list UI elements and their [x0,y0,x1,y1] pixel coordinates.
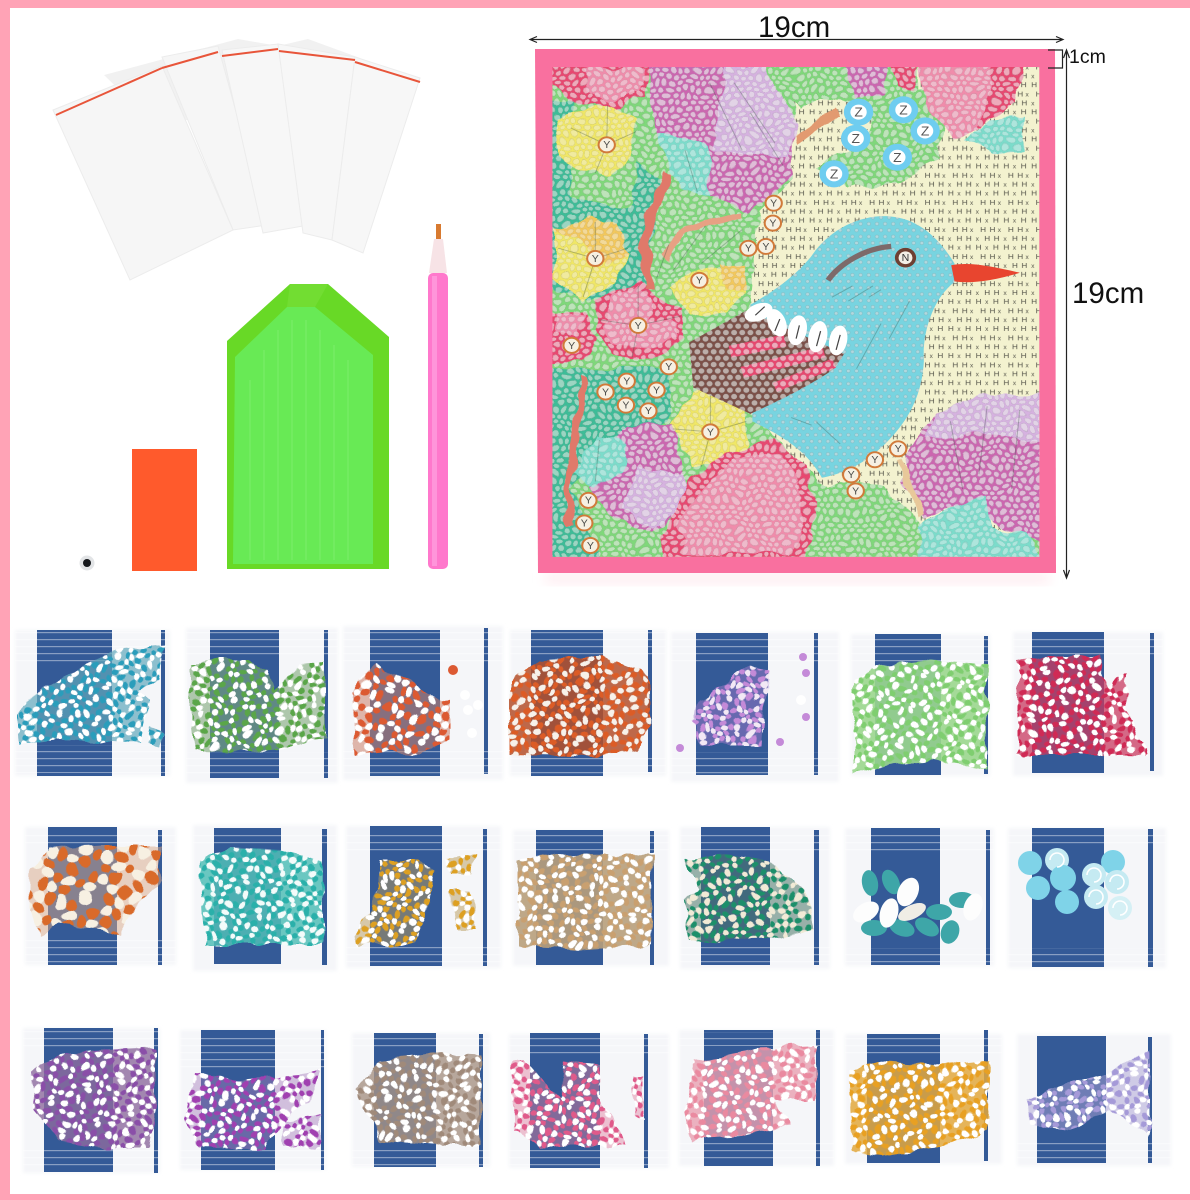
gems [1018,848,1132,920]
Y orange-ring beads: Y [568,341,575,352]
Y orange-ring beads: Y [745,244,752,255]
Y orange-ring beads: Y [707,428,714,438]
gems [849,867,986,946]
gems [185,1070,320,1150]
Y orange-ring beads: Y [585,496,592,507]
dimension: width 19cm: 19cm [758,11,830,44]
gem bag: large orange [25,827,176,965]
Y orange-ring beads: Y [895,445,902,455]
Y orange-ring beads: Y [653,386,660,396]
gem bag: light green [851,634,990,776]
flowers, leaves and stems [546,60,1048,564]
bird beak [951,264,1020,282]
Z blue flowers: Z [899,103,908,117]
gems [352,665,483,755]
gem bag: teal [15,630,170,776]
Y orange-ring beads [563,137,906,553]
gems [849,1060,990,1155]
Y orange-ring beads: Y [623,377,630,387]
gems [684,852,812,942]
gems [685,1045,817,1140]
Y orange-ring beads: Y [587,541,594,552]
Y orange-ring beads: Y [603,141,610,151]
gem bag: champagne [513,830,669,966]
gem bag: purple [23,1028,160,1173]
Y orange-ring beads: Y [769,219,777,229]
leaf and petal veins [559,83,1020,489]
small round tool [80,556,94,570]
red wax block [132,449,197,571]
Y orange-ring beads: Y [770,199,777,209]
panel: gem bags row 1 [15,626,1163,783]
gems [510,655,650,757]
gem bag: orange [343,626,503,780]
pink drill pen [428,224,448,569]
painting artwork [546,60,1048,564]
dimension: height 19cm [1064,50,1144,578]
Z blue flowers: Z [851,131,860,146]
zip bags fan [53,39,420,280]
Z blue flowers: Z [893,150,902,165]
gem bag: emerald [680,827,830,969]
gem bag: teardrop gems [845,828,994,966]
gem bag: lavender [1017,1034,1171,1166]
Y orange-ring beads: Y [852,487,859,497]
Z blue flowers [819,96,940,187]
gem bag: lilac [671,632,839,782]
dimension: width 19cm [530,11,1063,44]
gems [355,855,477,945]
Y orange-ring beads: Y [602,388,609,398]
Y orange-ring beads: Y [871,455,879,466]
gem bag: golden [845,1030,1002,1164]
gems [199,848,323,945]
gem bag: aqua [193,825,337,971]
bird body [750,216,954,478]
dimension: frame thickness 1cm [1048,46,1106,68]
gem bag: soft pink [679,1030,834,1166]
Y orange-ring beads: Y [645,407,652,417]
dimension: height 19cm: 19cm [1072,277,1144,310]
bird eye [895,248,916,267]
Y orange-ring beads: Y [592,254,599,265]
Y orange-ring beads: Y [665,363,673,373]
panel: gem bags row 3 [23,1028,1171,1173]
gem bag: violet [180,1030,326,1170]
bird eye: N [902,253,909,264]
gem bag: amber [346,826,501,968]
gems [17,645,165,745]
gems [853,660,987,775]
gems [676,653,810,752]
Y orange-ring beads: Y [762,242,770,253]
gems [1018,655,1150,757]
Y orange-ring beads: Y [581,519,588,529]
Y orange-ring beads: Y [622,401,630,411]
gems [356,1053,482,1145]
panel: tools and accessories [53,39,448,571]
panel: framed painting [535,49,1056,584]
Z blue flowers: Z [830,167,838,181]
gem bag: rose pink [509,1033,669,1168]
Y orange-ring beads: Y [696,276,703,287]
Z blue flowers: Z [921,124,929,138]
Z blue flowers: Z [854,105,863,120]
gems [31,1048,157,1148]
gems [512,1060,645,1147]
panel: gem bags row 2 [25,825,1166,971]
gems [1028,1050,1150,1135]
gem bag: taupe [352,1033,490,1167]
bird wing [689,299,850,414]
dimension: frame thickness 1cm: 1cm [1069,46,1106,68]
gem bag: deep orange [510,630,666,776]
Y orange-ring beads: Y [848,471,855,481]
Y orange-ring beads: Y [635,321,642,332]
gem bag: green [186,628,338,783]
gem bag: blue roses [1008,828,1166,968]
pink frame [535,49,1056,573]
gem bag: crimson [1013,632,1163,776]
gems [518,853,652,950]
green gem tray [227,284,389,569]
gems [191,660,325,752]
gems [30,845,160,935]
